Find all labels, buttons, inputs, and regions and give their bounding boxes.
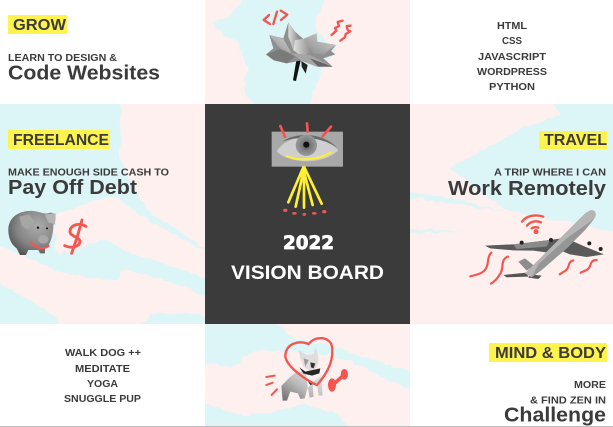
freelance label: FREELANCE xyxy=(13,132,109,149)
panel: tech list: HTML xyxy=(497,20,528,32)
mind and body text: & FIND ZEN IN xyxy=(530,396,606,406)
title: VISION BOARD xyxy=(231,262,384,284)
panel: tech list xyxy=(410,0,613,104)
icon: yellow light rays xyxy=(288,167,322,208)
grow text xyxy=(8,53,160,84)
freelance text xyxy=(8,168,169,199)
mind and body text: Challenge xyxy=(504,404,606,426)
mind and body text xyxy=(504,380,606,426)
icon: dollar sign xyxy=(65,220,86,253)
icon: code brackets xyxy=(264,11,351,41)
panel: center vision board xyxy=(205,104,410,324)
panel: dog xyxy=(205,324,410,426)
icon: motion lines xyxy=(266,376,277,395)
icon: eye xyxy=(272,123,343,167)
panel: tech list: CSS xyxy=(502,35,522,47)
icon: lotus flower xyxy=(266,22,336,81)
travel label: TRAVEL xyxy=(544,132,607,149)
freelance text: Pay Off Debt xyxy=(8,177,137,199)
panel: tech list: WORDPRESS xyxy=(477,66,547,78)
grow label: GROW xyxy=(13,17,66,34)
icon: bone xyxy=(328,369,348,392)
freelance text: MAKE ENOUGH SIDE CASH TO xyxy=(8,168,169,178)
icon: piggy bank xyxy=(8,211,56,255)
travel text xyxy=(448,168,607,200)
panel: dog list: YOGA xyxy=(87,378,118,390)
travel text: A TRIP WHERE I CAN xyxy=(494,168,606,178)
panel: dog list: WALK DOG ++ xyxy=(65,347,141,359)
icon: red squiggles xyxy=(470,253,597,284)
panel: travel xyxy=(405,98,613,324)
icon: airplane xyxy=(485,210,604,279)
grow text: Code Websites xyxy=(8,62,160,84)
panel: tech list: JAVASCRIPT xyxy=(478,51,547,63)
year: 2022 xyxy=(283,232,334,254)
panel: dog list xyxy=(0,324,205,427)
icon: wifi xyxy=(522,215,543,233)
panel: tech list: PYTHON xyxy=(489,81,535,93)
grow text: LEARN TO DESIGN & xyxy=(8,53,117,64)
panel: mind and body xyxy=(410,324,613,427)
icon: dog xyxy=(281,347,323,401)
red rays xyxy=(280,123,331,137)
panel: dog list: MEDITATE xyxy=(75,363,130,375)
icon: red dots xyxy=(283,209,326,216)
mind and body label: MIND & BODY xyxy=(495,345,607,362)
travel text: Work Remotely xyxy=(448,178,607,200)
panel: lotus xyxy=(205,0,410,110)
panel: dog list: SNUGGLE PUP xyxy=(64,393,141,405)
mind and body text: MORE xyxy=(574,380,606,391)
icon: heart xyxy=(285,338,332,385)
panel: grow xyxy=(0,0,205,104)
panel: freelance xyxy=(0,98,210,330)
